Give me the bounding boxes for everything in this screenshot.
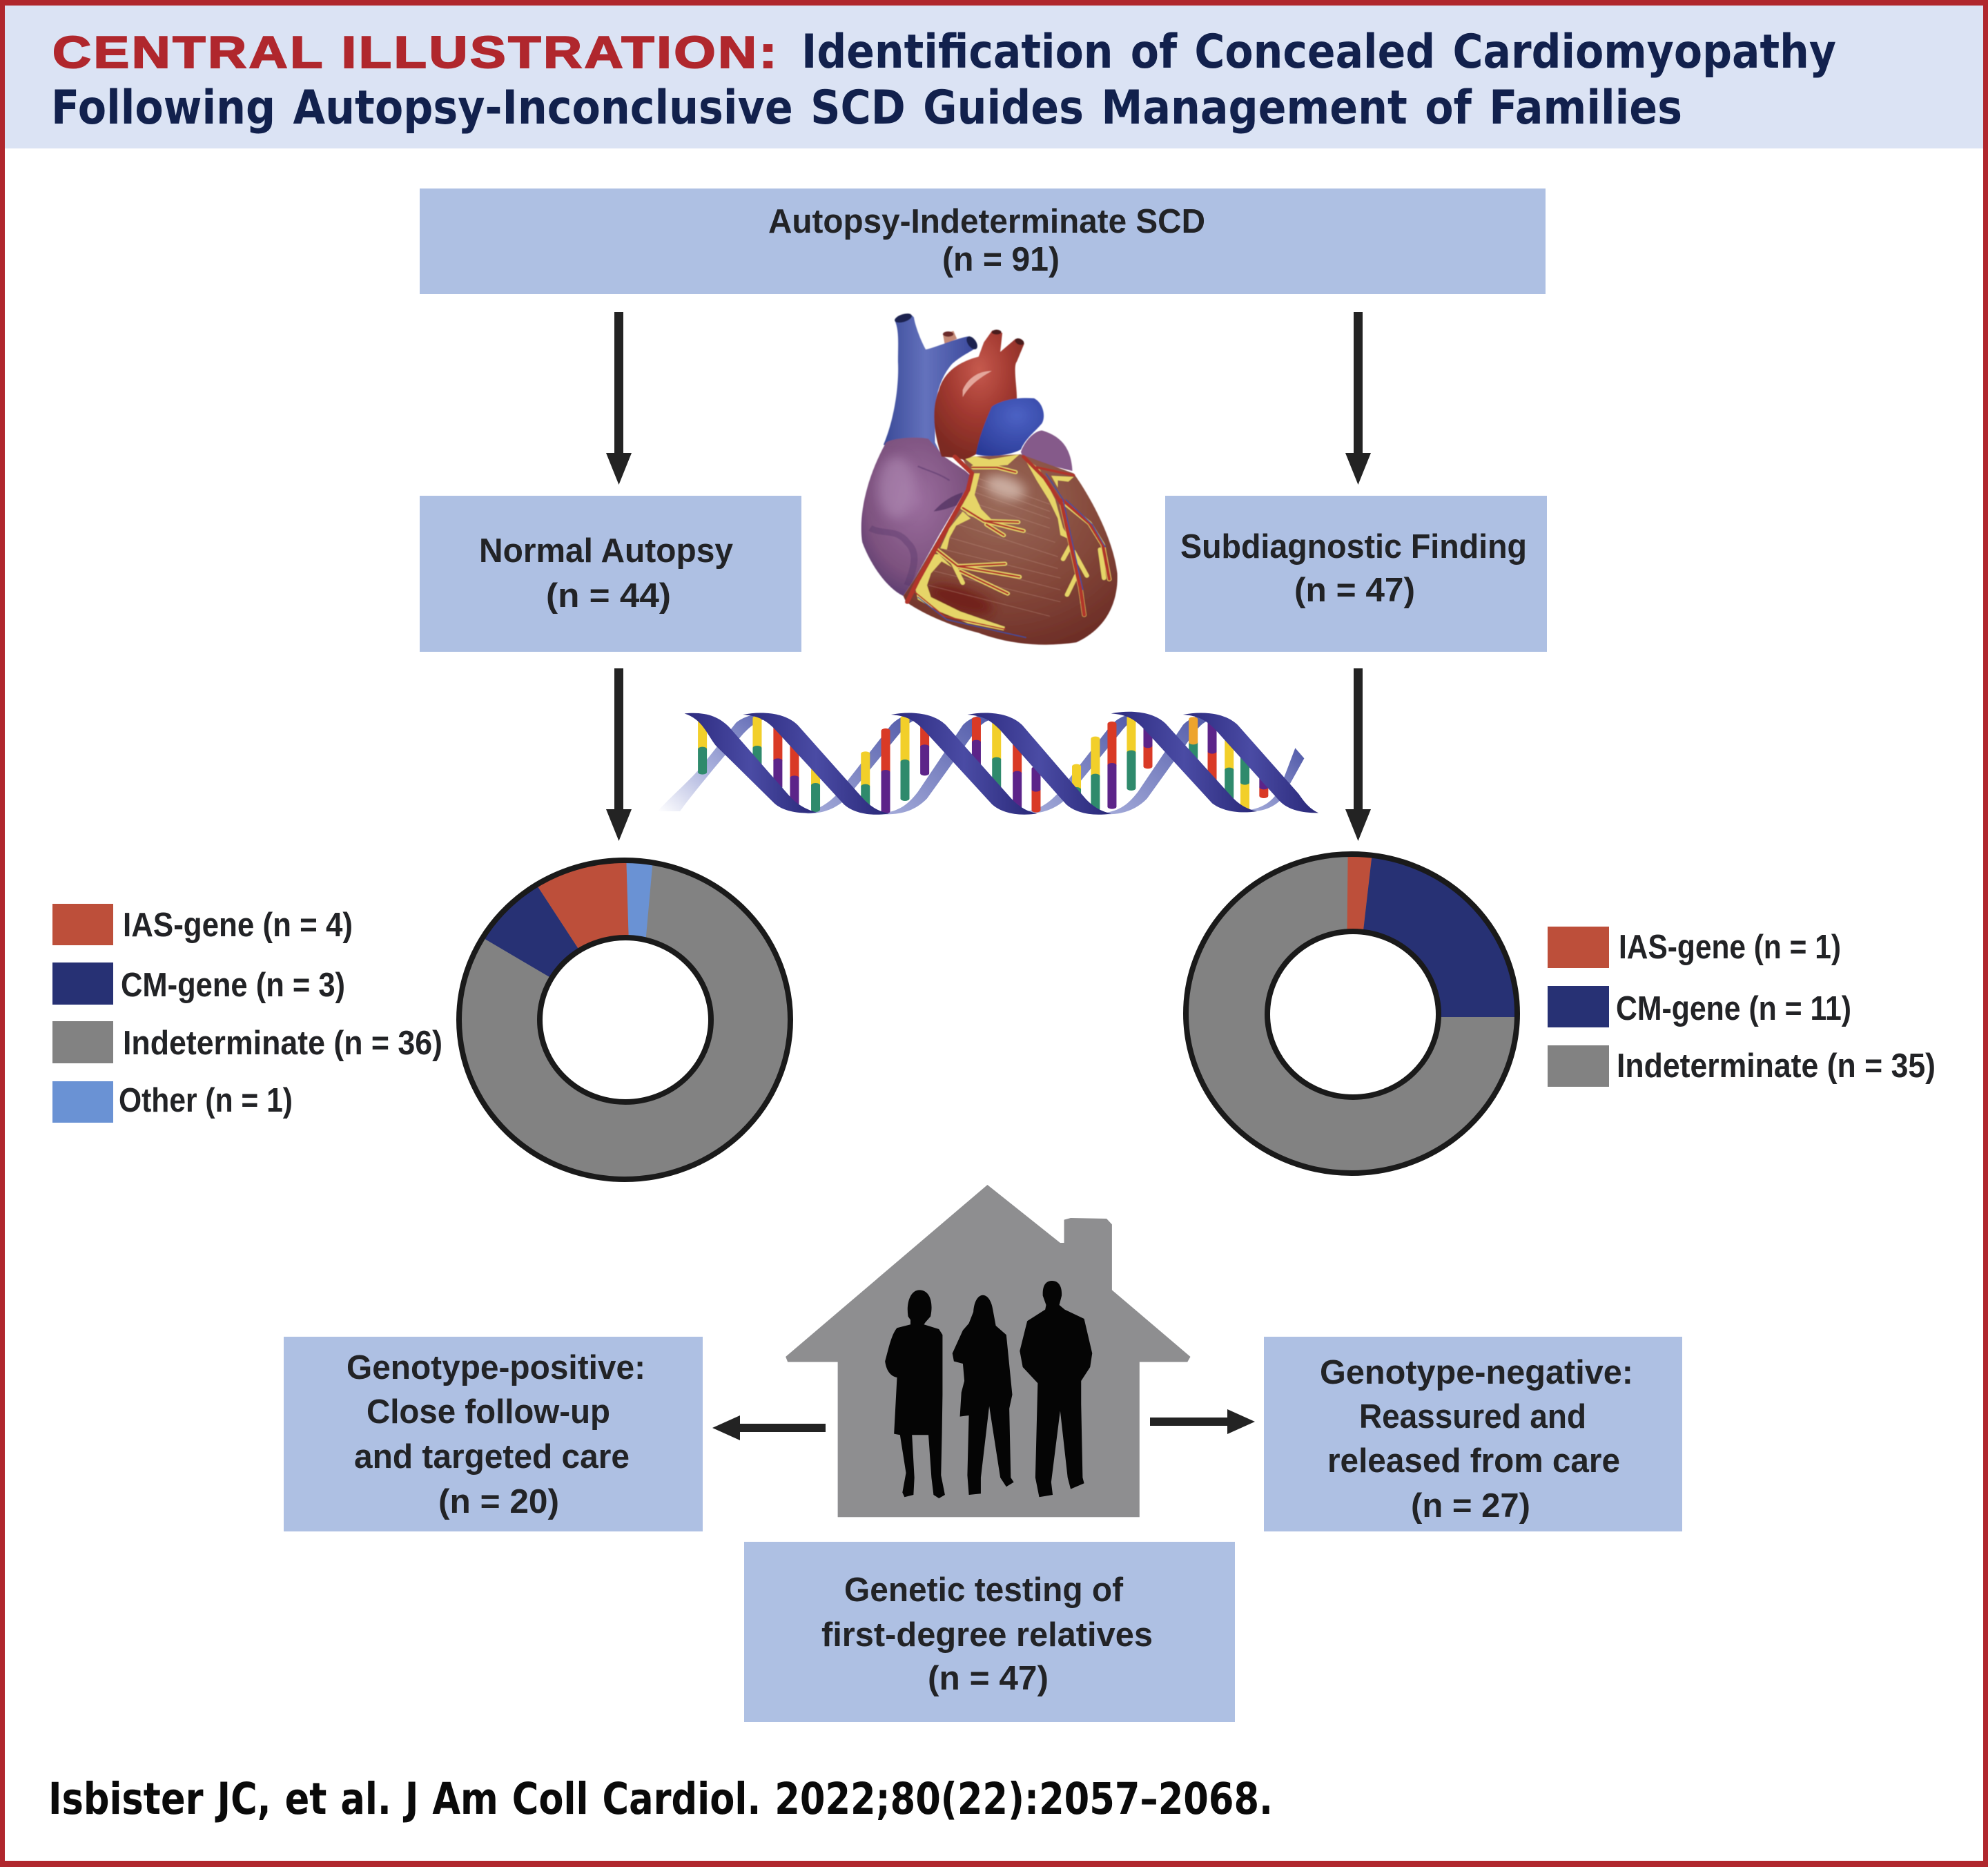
box: genotype-positive <box>284 1337 703 1531</box>
icon: heart illustration <box>861 311 1118 645</box>
box: subdiagnostic finding: (n = 47) <box>1294 572 1415 609</box>
arrow: to genotype-positive <box>712 1415 826 1440</box>
legend: left donut <box>52 904 442 1123</box>
legend item: IAS-gene: IAS-gene (n = 4) <box>123 907 353 944</box>
donut chart: normal autopsy <box>456 829 790 1179</box>
silhouette: man <box>1020 1281 1092 1497</box>
box: subdiagnostic finding: Subdiagnostic Finding <box>1180 528 1527 565</box>
arrow: top left <box>606 312 632 485</box>
box: genetic testing of first-degree relatives: first-degree relatives <box>821 1616 1153 1654</box>
box: normal autopsy <box>420 496 801 652</box>
icon: DNA double helix <box>658 712 1318 815</box>
legend item: Indeterminate: Indeterminate (n = 35) <box>1617 1047 1936 1085</box>
donut chart: subdiagnostic finding <box>1183 851 1520 1176</box>
legend item: IAS-gene <box>1548 927 1841 968</box>
title label: CENTRAL ILLUSTRATION: <box>52 27 779 77</box>
legend item: CM-gene <box>1548 986 1851 1027</box>
legend item: CM-gene: CM-gene (n = 11) <box>1616 990 1851 1027</box>
box: genotype-positive: (n = 20) <box>438 1483 559 1520</box>
dark strands <box>685 712 1318 815</box>
arrow: mid right <box>1345 668 1371 841</box>
box: genetic testing of first-degree relatives: Genetic testing of <box>844 1571 1124 1609</box>
title second line: Following Autopsy-Inconclusive SCD Guides Management of Families <box>51 81 1682 135</box>
box: genotype-positive: Close follow-up <box>367 1393 610 1431</box>
arrow: to genotype-negative <box>1150 1409 1255 1434</box>
title first line: Identification of Concealed Cardiomyopathy <box>801 25 1836 79</box>
legend: right donut <box>1548 927 1936 1087</box>
box: genotype-negative: (n = 27) <box>1411 1487 1530 1525</box>
box: autopsy-indeterminate SCD <box>420 188 1546 294</box>
header title band <box>5 6 1983 148</box>
box: genetic testing of first-degree relatives: (n = 47) <box>928 1660 1049 1697</box>
legend item: Indeterminate: Indeterminate (n = 36) <box>123 1025 442 1062</box>
arrow: mid left <box>606 668 632 841</box>
legend item: Indeterminate <box>52 1021 442 1063</box>
box: normal autopsy: Normal Autopsy <box>479 532 733 570</box>
legend item: CM-gene: CM-gene (n = 3) <box>121 967 345 1004</box>
box: genotype-positive: Genotype-positive: <box>347 1349 645 1386</box>
legend item: IAS-gene <box>52 904 353 945</box>
box: autopsy-indeterminate SCD: (n = 91) <box>942 241 1060 278</box>
box: genotype-negative: released from care <box>1327 1442 1620 1480</box>
legend item: Other <box>52 1081 293 1123</box>
silhouette: woman in dress <box>885 1290 945 1498</box>
citation footer: Isbister JC, et al. J Am Coll Cardiol. 2022;80(22):2057–2068. <box>48 1774 1273 1824</box>
legend item: CM-gene <box>52 962 345 1005</box>
legend item: Indeterminate <box>1548 1045 1936 1087</box>
legend item: IAS-gene: IAS-gene (n = 1) <box>1619 929 1841 966</box>
box: autopsy-indeterminate SCD: Autopsy-Indeterminate SCD <box>768 203 1205 240</box>
light strands <box>658 713 1304 814</box>
box: genetic testing of first-degree relatives <box>744 1542 1235 1722</box>
box: genotype-positive: and targeted care <box>354 1438 630 1476</box>
box: genotype-negative: Genotype-negative: <box>1320 1354 1633 1391</box>
box: genotype-negative <box>1264 1337 1682 1531</box>
icon: house with family silhouettes <box>786 1185 1191 1517</box>
silhouette: woman with long hair <box>953 1295 1014 1495</box>
legend item: Other: Other (n = 1) <box>119 1082 293 1119</box>
arrow: top right <box>1345 312 1371 485</box>
base pairs <box>703 716 1264 811</box>
box: subdiagnostic finding <box>1165 496 1547 652</box>
box: normal autopsy: (n = 44) <box>546 577 671 615</box>
box: genotype-negative: Reassured and <box>1359 1398 1586 1435</box>
